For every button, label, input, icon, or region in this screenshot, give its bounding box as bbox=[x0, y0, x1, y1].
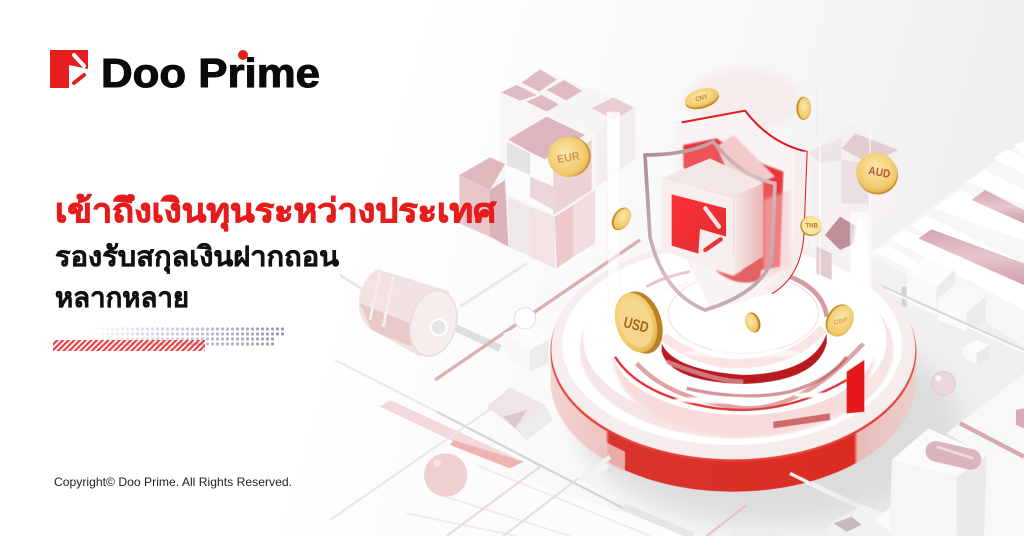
subheading line 1: รองรับสกุลเงินฝากถอน bbox=[55, 241, 339, 274]
coin: AUD bbox=[850, 146, 904, 201]
coin: EUR bbox=[542, 131, 596, 183]
coin: GBP bbox=[820, 300, 859, 341]
logo: Doo Prime bbox=[50, 50, 320, 96]
bottom left: pink sphere, stairs and rods bbox=[330, 360, 783, 536]
coin: bottom small bbox=[742, 310, 763, 335]
coin: top right bbox=[796, 97, 811, 120]
coin: USD bbox=[608, 286, 670, 359]
platform shadow bbox=[580, 325, 960, 525]
glass cylinder bbox=[340, 263, 527, 361]
back shield bbox=[673, 111, 807, 310]
heading: เข้าถึงเงินทุนระหว่างประเทศ bbox=[55, 192, 497, 232]
platform bbox=[550, 239, 916, 498]
icon: red logo on cube bbox=[672, 194, 726, 254]
coin: USD: USD bbox=[622, 314, 650, 337]
coin: GBP: GBP bbox=[833, 317, 849, 327]
logo cube bbox=[662, 158, 763, 283]
right side: stepped panels with pink bars bbox=[793, 140, 1024, 536]
coin: top: CNY bbox=[695, 94, 709, 104]
main group drawn in zoomed coordinates bbox=[542, 70, 916, 498]
coin: left small bbox=[608, 204, 635, 234]
right glass cube bbox=[808, 125, 898, 343]
pink rod and small block bbox=[435, 240, 640, 380]
logo wordmark: Doo Prime bbox=[101, 50, 320, 96]
icon: logo mark bbox=[50, 50, 88, 88]
copyright: Copyright© Doo Prime. All Rights Reserved. bbox=[54, 475, 292, 489]
coin: THB: THB bbox=[806, 224, 818, 230]
coin: top bbox=[682, 85, 721, 113]
platform glow bbox=[673, 349, 833, 403]
logo i-dot bbox=[238, 50, 248, 60]
coin: EUR: EUR bbox=[556, 150, 581, 166]
coin: AUD: AUD bbox=[867, 165, 891, 181]
glass cube stack bbox=[459, 69, 635, 269]
decorative dots bbox=[101, 327, 284, 346]
subheading line 2: หลากหลาย bbox=[55, 282, 189, 313]
front glass shield bbox=[645, 142, 775, 310]
decorative hatched bar bbox=[53, 340, 205, 351]
coin: THB bbox=[800, 216, 822, 236]
light beams bbox=[607, 70, 817, 310]
